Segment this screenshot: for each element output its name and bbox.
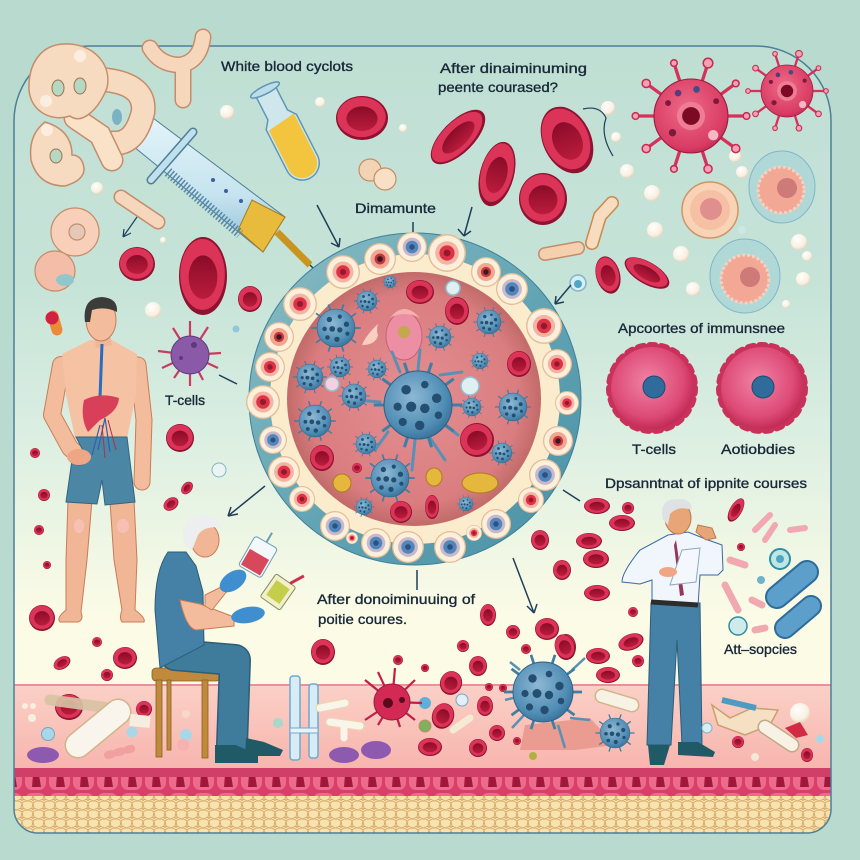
text: antibodies lower label: Att–sopcies bbox=[724, 641, 797, 657]
small blue viruses bbox=[293, 275, 531, 517]
text: antibodies label: Aotiobdies bbox=[721, 441, 795, 457]
outer teal ring bbox=[249, 233, 581, 565]
floor: bone fragments and purple granules bbox=[273, 694, 537, 763]
floor: pink debris and capsules left bbox=[22, 694, 192, 763]
text: after diminishing label bottom: After donoiminuuing of bbox=[317, 591, 475, 607]
icons: red blood cells top bbox=[119, 96, 674, 315]
figure: standing doctor with notes bbox=[622, 499, 723, 765]
pale rings inside bbox=[325, 281, 479, 395]
torso bbox=[155, 552, 204, 668]
icon: peach cell bbox=[682, 182, 738, 238]
arrow: small top-left bbox=[123, 217, 137, 237]
test strip bbox=[260, 562, 304, 610]
head and raised hand bbox=[665, 502, 691, 534]
gloves bbox=[230, 604, 266, 626]
arms bbox=[52, 365, 144, 482]
shirt bbox=[622, 532, 723, 606]
icon: lab tubes on floor bbox=[290, 676, 318, 760]
icon: encapsulated cell lower bbox=[710, 226, 780, 313]
text: white blood cells label: White blood cyclots bbox=[221, 58, 353, 74]
tie and papers bbox=[674, 540, 684, 596]
central blue virus bbox=[356, 350, 462, 470]
arrow: circle to floor virus bbox=[513, 558, 537, 613]
icon: pill red and orange bbox=[46, 312, 58, 330]
arrow: T-cell line bbox=[219, 375, 237, 384]
arrow: lens to circle bbox=[555, 285, 571, 304]
text: heading immune right: Apcoortes of immunsnee bbox=[618, 320, 785, 336]
cream membrane bbox=[270, 254, 560, 544]
vessel and liver bbox=[100, 344, 102, 398]
shoes bbox=[215, 745, 258, 763]
text: after diminishing label top: peente courased? bbox=[438, 79, 558, 95]
head bbox=[191, 523, 219, 557]
text: after diminishing label bottom: poitie coures. bbox=[318, 611, 407, 627]
arrow: bottom label line bbox=[416, 570, 418, 590]
icon: antibody big pink bbox=[720, 346, 804, 430]
icon: small blue virus on floor bbox=[596, 714, 634, 752]
figure: seated technician bbox=[152, 515, 304, 763]
icon: Y shaped antibody top bbox=[150, 37, 203, 100]
chart: central immune cell circle bbox=[246, 232, 581, 565]
ring of cells bbox=[246, 232, 579, 563]
icon: peach antibody cluster top left bbox=[29, 44, 143, 186]
arrow: small right line bbox=[563, 490, 580, 501]
icons: peach fragments and donut bbox=[35, 159, 396, 291]
icon: small pink virus bbox=[746, 50, 828, 131]
shoes bbox=[648, 745, 670, 765]
pants bbox=[175, 655, 235, 745]
yellow granules bbox=[333, 468, 498, 493]
icons: small pale bubbles bbox=[91, 97, 812, 318]
text: after diminishing label bottom bbox=[317, 591, 475, 627]
icon: T-cell big pink bbox=[610, 346, 694, 430]
icon: capsule and lens near ring bbox=[545, 203, 612, 291]
icons: pink molecules and blue capsules bbox=[725, 515, 811, 635]
arrow: label to circle bbox=[412, 222, 414, 232]
icon: red virus on floor bbox=[365, 668, 422, 727]
text: T-cells left label: T-cells bbox=[165, 392, 205, 408]
text: description heading: Dpsanntnat of ippnite courses bbox=[605, 475, 807, 491]
text: T-cells right label: T-cells bbox=[632, 441, 676, 457]
inner pink tissue bbox=[287, 272, 541, 526]
stool bbox=[152, 668, 220, 758]
torso bbox=[62, 340, 137, 438]
icon: floor crater and large blue virus bbox=[504, 655, 615, 750]
icon: purple T-cell virus bbox=[158, 321, 221, 386]
icon: test tube bbox=[248, 79, 325, 186]
figure: standing man with liver bbox=[52, 297, 144, 622]
icon: syringe bbox=[128, 112, 350, 305]
organelle pink bbox=[362, 309, 422, 360]
shorts bbox=[66, 437, 135, 505]
text: after diminishing label top: After dinaiminuming bbox=[440, 60, 587, 76]
arms bbox=[180, 600, 234, 630]
icons: red cells lower left bbox=[29, 326, 240, 681]
icon: encapsulated cell upper bbox=[749, 151, 815, 223]
red cells inside circle bbox=[310, 280, 531, 523]
arrow: test tube to circle bbox=[317, 205, 340, 247]
arrow: red cells to circle bbox=[458, 207, 472, 236]
head and hair bbox=[94, 335, 112, 348]
vial bbox=[238, 526, 283, 578]
arrow: curve near top cells bbox=[583, 108, 613, 156]
text: after diminishing label top bbox=[438, 60, 587, 95]
floor: pills right bbox=[602, 696, 824, 762]
icon: large pink virus bbox=[632, 58, 750, 173]
legs bbox=[59, 500, 92, 622]
pants bbox=[647, 603, 702, 745]
arrow: down left to technician bbox=[228, 486, 265, 516]
text: central label: Dimamunte bbox=[355, 200, 436, 216]
icons: red cells centre right bbox=[311, 496, 748, 757]
